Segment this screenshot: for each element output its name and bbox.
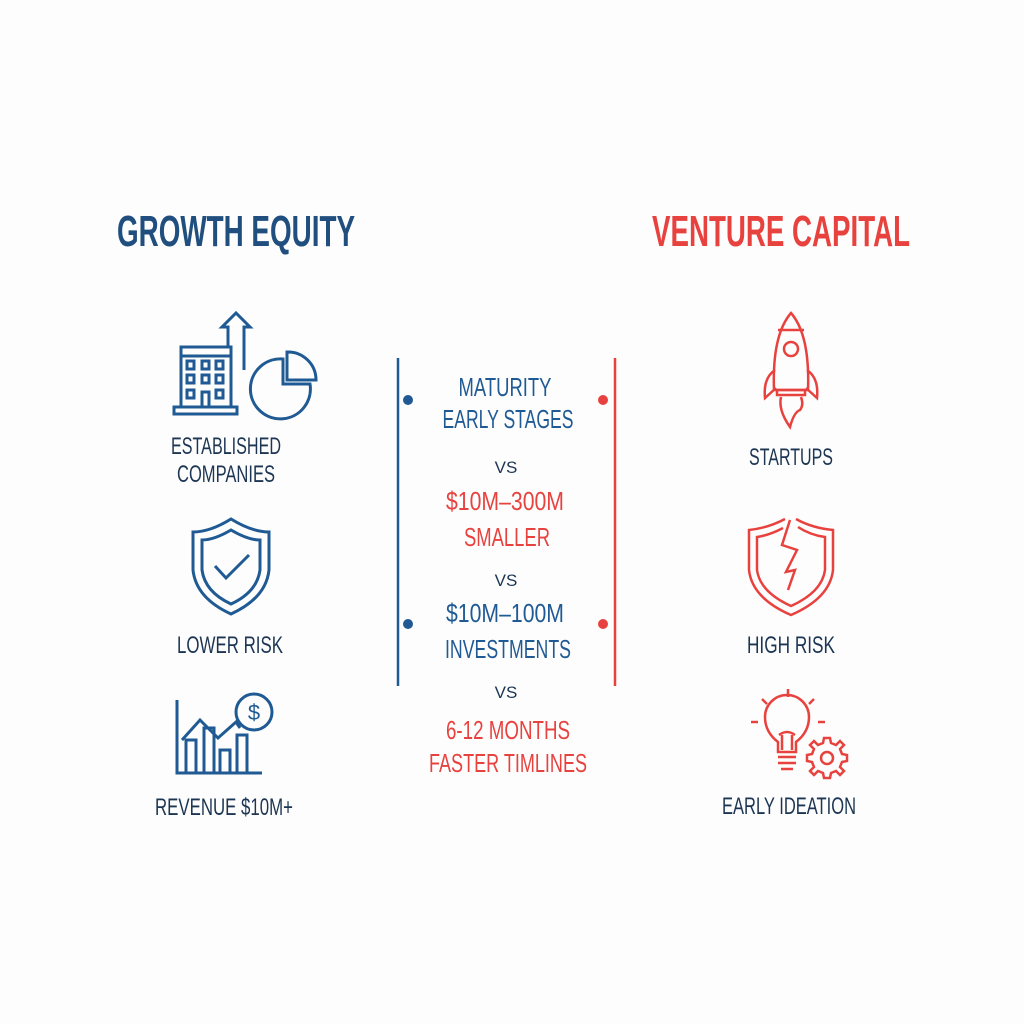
label: early ideation: EARLY IDEATION [722,793,856,820]
text: $ [248,700,260,725]
label: established companies: ESTABLISHED [171,433,281,460]
label: revenue: REVENUE $10M+ [155,794,293,821]
comparison column: MATURITY [458,372,552,402]
icon: revenue chart [177,694,272,773]
comparison column: INVESTMENTS [445,634,571,664]
comparison column: VS [495,683,517,702]
label: high risk: HIGH RISK [747,632,835,659]
label: established companies [171,433,281,488]
comparison column: $10M–300M [446,486,564,516]
title: growth equity: GROWTH EQUITY [117,207,355,256]
comparison column: VS [495,458,517,477]
icon: lightbulb and gear [751,689,847,778]
icon: shield with check [193,519,269,614]
comparison column: SMALLER [464,522,550,552]
comparison column: VS [495,571,517,590]
icon: rocket [765,313,817,427]
label: lower risk: LOWER RISK [177,632,283,659]
comparison column: FASTER TIMLINES [429,748,587,778]
label: startups: STARTUPS [749,444,833,471]
icon: broken shield [749,519,833,615]
label: established companies: COMPANIES [177,461,275,488]
comparison column: $10M–100M [446,598,564,628]
comparison column: EARLY STAGES [442,404,574,434]
comparison column [398,358,615,778]
comparison column: 6-12 MONTHS [446,715,570,745]
icon: building with arrow and pie [174,313,316,419]
